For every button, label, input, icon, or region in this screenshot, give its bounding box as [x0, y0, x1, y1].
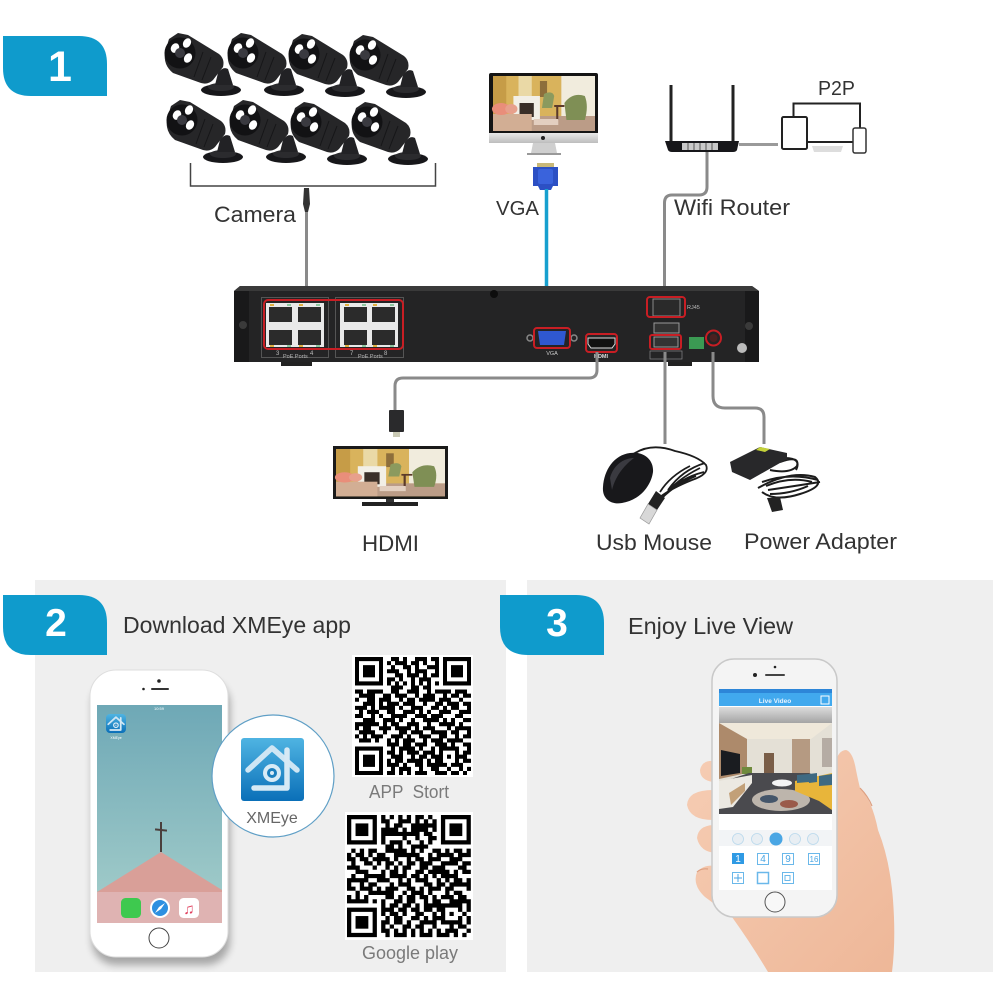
HDMI television	[333, 446, 448, 506]
PoE port group B: 7	[350, 351, 354, 357]
PoE port group B	[336, 298, 404, 360]
camera 6	[230, 100, 306, 163]
chassis	[234, 286, 759, 362]
mains plug	[767, 497, 783, 512]
HDMI plug	[389, 410, 404, 437]
label: VGA: VGA	[496, 198, 540, 220]
app: music	[179, 898, 199, 918]
wifi router	[665, 85, 739, 152]
QR code: App Store	[352, 655, 473, 777]
PoE port group A: 4	[310, 351, 314, 357]
phone body	[712, 659, 837, 917]
label: APP Stort: APP Stort	[369, 782, 449, 802]
label: HDMI: HDMI	[362, 531, 419, 556]
phone	[853, 128, 866, 153]
P2P devices	[782, 104, 866, 153]
camera 1	[164, 33, 241, 96]
mouse body	[603, 453, 653, 503]
gray header band	[719, 707, 832, 723]
PoE port group B: 8	[384, 351, 388, 357]
VGA port: VGA	[546, 351, 558, 357]
cameras group	[164, 33, 428, 165]
HDMI cable	[395, 352, 597, 410]
view grid buttons: 16	[810, 855, 819, 864]
phone with home screen	[90, 670, 230, 965]
iMac monitor	[489, 73, 598, 155]
laptop base	[812, 146, 843, 152]
camera 8	[352, 102, 428, 165]
screws	[239, 321, 247, 329]
PoE port group A: 3	[276, 351, 280, 357]
camera bracket	[190, 163, 436, 186]
laptop	[794, 104, 860, 142]
earpiece	[753, 666, 785, 677]
hand holding phone	[687, 750, 894, 972]
view grid buttons: 1	[735, 854, 741, 865]
label: Power Adapter: Power Adapter	[744, 529, 897, 554]
XMEye callout	[212, 715, 334, 837]
USB ports	[650, 323, 682, 359]
step 3 badge: 3	[546, 602, 568, 645]
camera 4	[350, 35, 426, 98]
phone with live video app	[712, 659, 837, 917]
camera 3	[288, 34, 365, 97]
power cable	[713, 352, 764, 444]
label: Camera: Camera	[214, 202, 297, 227]
PoE port group A: PoE Ports	[283, 354, 308, 360]
XMEye label: XMEye	[246, 810, 298, 827]
VGA port	[527, 328, 577, 357]
red highlight: PoE ports	[264, 300, 403, 349]
view grid buttons: 9	[785, 854, 791, 865]
link from router to P2P devices	[739, 143, 778, 146]
step 3 badge	[500, 595, 604, 655]
VGA connector	[533, 163, 558, 190]
phone body	[90, 670, 228, 957]
heading: Enjoy Live View: Enjoy Live View	[628, 613, 793, 639]
adapter cords	[758, 458, 820, 498]
feet	[281, 361, 692, 366]
power adapter	[730, 447, 820, 512]
status bar: 10:59	[154, 706, 165, 711]
app: music: ♫	[183, 901, 195, 918]
step 2 badge: 2	[45, 602, 67, 645]
NVR recorder	[234, 286, 759, 366]
RJ45 WAN port: RJ45	[687, 305, 700, 311]
VGA cable	[545, 189, 548, 330]
view grid buttons	[732, 853, 820, 884]
adapter brick	[730, 447, 787, 480]
USB mouse	[603, 447, 707, 524]
mouse cable	[664, 352, 666, 444]
label: Usb Mouse: Usb Mouse	[596, 530, 712, 555]
step 2 badge	[3, 595, 107, 655]
tablet	[782, 117, 807, 149]
heading: Download XMEye app: Download XMEye app	[123, 612, 351, 638]
mouse cord	[632, 447, 707, 498]
app bar: Live Video	[759, 698, 791, 705]
XMEye app icon	[241, 738, 304, 801]
app: phone	[121, 898, 141, 918]
app: safari	[150, 898, 170, 918]
USB plug	[648, 491, 665, 510]
phone shadow	[92, 680, 230, 965]
label: P2P: P2P	[818, 78, 855, 100]
camera network cable	[303, 188, 310, 300]
label: Wifi Router: Wifi Router	[674, 195, 790, 220]
label: Google play: Google play	[362, 943, 458, 963]
power socket	[706, 330, 721, 346]
home button	[765, 892, 785, 912]
alarm terminal	[689, 337, 704, 349]
PoE port group A	[262, 298, 328, 360]
step 1 badge	[3, 36, 107, 96]
HDMI port	[586, 334, 617, 360]
small XMEye app icon	[106, 714, 126, 740]
camera 5	[166, 100, 243, 163]
camera 2	[228, 33, 304, 96]
HDMI port: HDMI	[594, 354, 608, 360]
wallpaper	[97, 705, 222, 923]
app bar	[719, 689, 832, 706]
RJ45 WAN port	[647, 297, 700, 317]
panel: live view	[500, 580, 993, 972]
screen	[719, 689, 832, 890]
PoE port group B: PoE Ports	[358, 354, 383, 360]
panel: download app	[3, 580, 506, 972]
earpiece	[142, 679, 169, 690]
QR code: Google Play	[345, 812, 473, 940]
live room video	[719, 723, 832, 814]
step 1 badge: 1	[48, 43, 72, 91]
router cable	[664, 152, 707, 300]
camera 7	[290, 102, 367, 165]
control toolbar	[719, 830, 832, 846]
small XMEye app icon: XMEye	[110, 736, 122, 740]
home button	[149, 928, 169, 948]
view grid buttons: 4	[760, 854, 766, 865]
